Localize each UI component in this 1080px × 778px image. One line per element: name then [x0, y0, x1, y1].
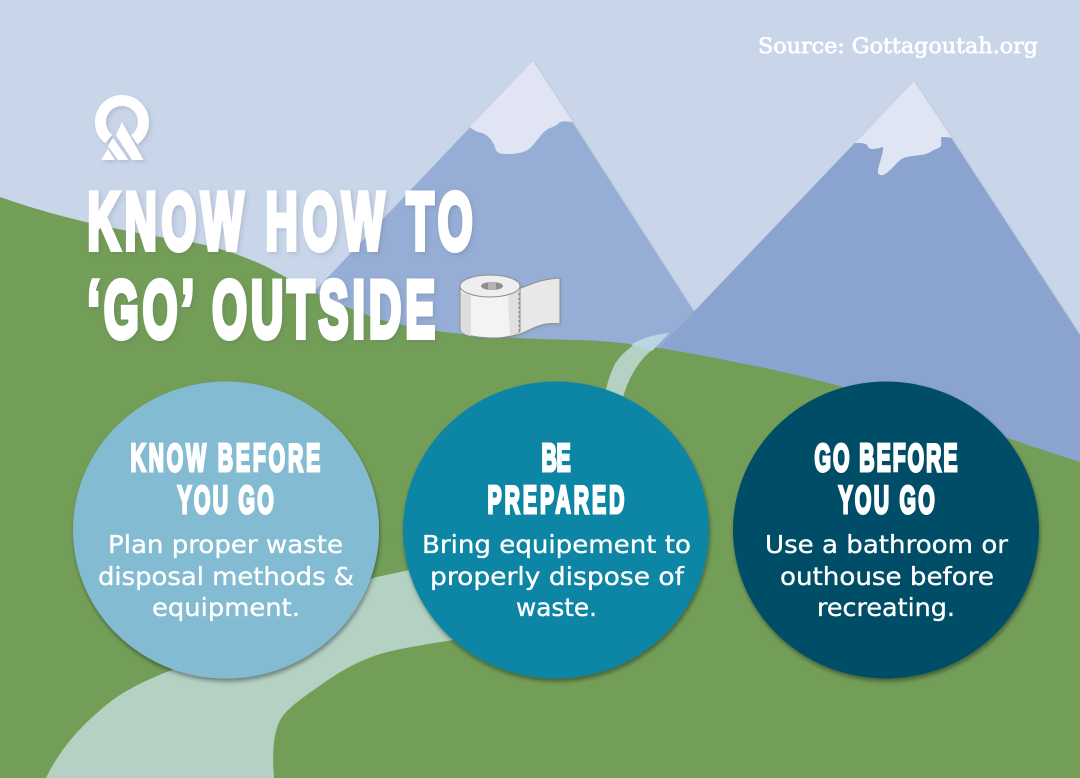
right mountain — [640, 81, 1080, 480]
text: be prepared — [422, 530, 691, 622]
text: be prepared: properly dispose of — [430, 562, 685, 591]
lower river — [46, 560, 480, 778]
heading: know before you go: YOU GO — [178, 479, 274, 522]
title: KNOW HOW TO — [88, 176, 473, 266]
text: know before you go: Plan proper waste — [108, 530, 343, 559]
text: go before you go: outhouse before — [780, 562, 994, 591]
heading: go before you go — [814, 437, 958, 522]
heading: go before you go: YOU GO — [838, 479, 935, 522]
heading: be prepared — [488, 437, 624, 522]
logo — [100, 100, 144, 160]
icon: toilet paper roll — [460, 275, 560, 338]
text: be prepared: Bring equipement to — [422, 530, 691, 559]
heading: go before you go: GO BEFORE — [814, 437, 958, 480]
text: be prepared: waste. — [516, 593, 597, 622]
upper river over mountain — [631, 333, 669, 351]
heading: know before you go — [130, 437, 320, 522]
left mountain snow cap — [470, 61, 573, 154]
text: go before you go — [765, 530, 1009, 622]
title: ‘GO’ OUTSIDE — [88, 264, 435, 354]
text: go before you go: Use a bathroom or — [765, 530, 1009, 559]
text: know before you go: disposal methods & — [98, 562, 354, 591]
panel: go before you go — [733, 382, 1039, 678]
heading: be prepared: BE — [542, 437, 571, 480]
green hills — [0, 197, 1080, 778]
panel: be prepared — [403, 382, 709, 678]
panel: know before you go — [73, 382, 379, 678]
title — [88, 176, 472, 354]
source credit: Source: Gottagoutah.org — [758, 34, 1038, 58]
text: know before you go: equipment. — [152, 593, 300, 622]
right mountain snow cap — [855, 81, 952, 175]
left mountain — [300, 61, 760, 420]
text: go before you go: recreating. — [817, 593, 955, 622]
upper river — [606, 333, 669, 397]
heading: be prepared: PREPARED — [488, 479, 624, 522]
heading: know before you go: KNOW BEFORE — [130, 437, 320, 480]
text: know before you go — [98, 530, 354, 622]
